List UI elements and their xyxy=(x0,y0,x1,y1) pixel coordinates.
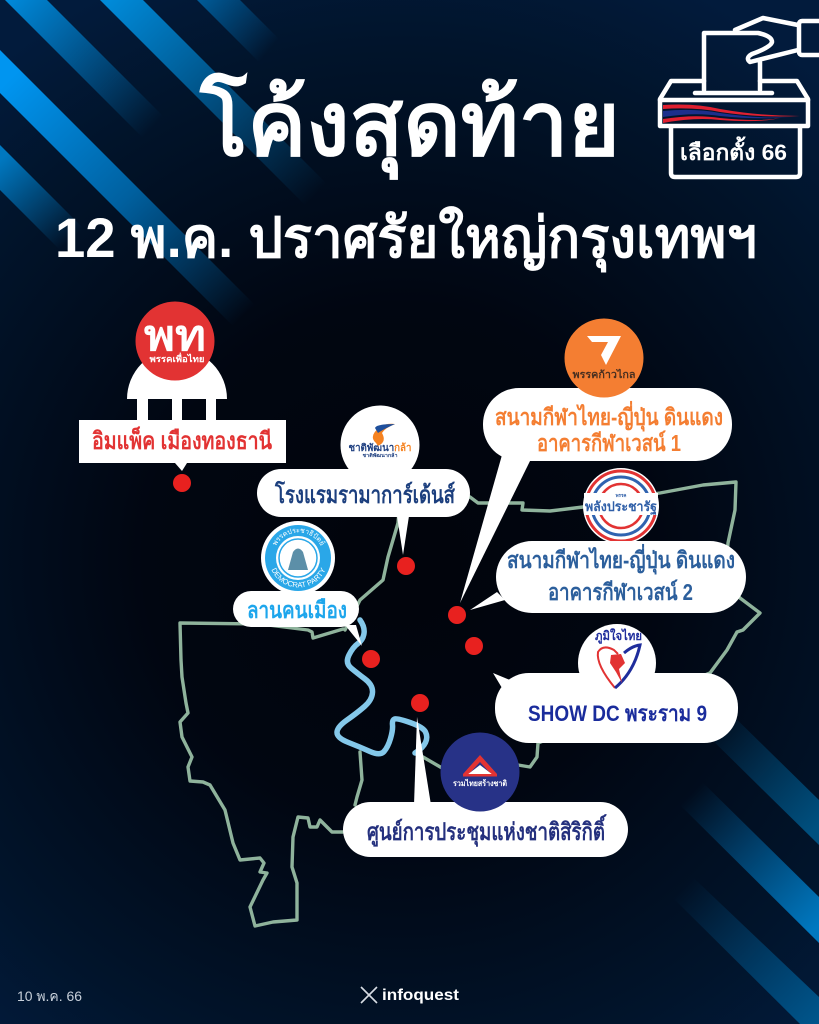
Pheu Thai canopy xyxy=(127,349,227,421)
dot: Thai-Japan 1 and 2 xyxy=(448,606,466,624)
callout: Lan Khon Mueang: ลานคนเมือง xyxy=(247,597,347,623)
dot: Rama Gardens xyxy=(397,557,415,575)
dot: Lan Khon Mueang xyxy=(362,650,380,668)
callout: SHOW DC xyxy=(493,624,738,743)
logo: Chart Pattana Kla: ชาติพัฒนากล้า xyxy=(348,442,412,454)
logo: Move Forward: พรรคก้าวไกล xyxy=(572,368,636,381)
callout: Sirikit Centre xyxy=(343,717,628,857)
subtitle: 12 พ.ค. ปราศรัยใหญ่กรุงเทพฯ xyxy=(55,205,757,273)
logo: Democrat: พรรคประชาธิปัตย์ xyxy=(272,528,326,546)
logo: Palang Pracharath: พรรค xyxy=(616,493,626,498)
logo: Chart Pattana Kla: ชาติพัฒนากล้า xyxy=(362,452,398,459)
ballot ribbon xyxy=(663,104,800,123)
callout: Pheu Thai: อิมแพ็ค เมืองทองธานี xyxy=(92,426,272,455)
logo: Move Forward xyxy=(564,318,644,398)
callout: Rama Gardens: โรงแรมรามาการ์เด้นส์ xyxy=(274,480,455,509)
date: 10 พ.ค. 66 xyxy=(17,988,82,1004)
logo: Bhumjaithai xyxy=(595,628,642,688)
logo: Ruam Thai Sang Chart xyxy=(440,732,520,812)
callout: Thai-Japan 2: อาคารกีฬาเวสน์ 2 xyxy=(548,579,693,605)
callout: Thai-Japan 1: สนามกีฬาไทย-ญี่ปุ่น ดินแดง xyxy=(495,400,723,432)
callout: Thai-Japan 1 xyxy=(460,388,732,603)
dot: SHOW DC xyxy=(465,637,483,655)
callout: Sirikit Centre: ศูนย์การประชุมแห่งชาติสิริกิติ์ xyxy=(367,814,607,848)
callout: Thai-Japan 2 xyxy=(470,541,746,613)
dot: Sirikit Centre xyxy=(411,694,429,712)
logo: Democrat xyxy=(261,521,335,591)
logo: Pheu Thai: พท xyxy=(144,312,206,359)
logo: Palang Pracharath: พลังประชารัฐ xyxy=(585,499,657,516)
title: โค้งสุดท้าย xyxy=(199,72,620,181)
map: province outline xyxy=(180,482,760,926)
callout: SHOW DC: SHOW DC พระราม 9 xyxy=(528,701,707,726)
logo: Chart Pattana Kla xyxy=(340,406,420,484)
logo: Palang Pracharath xyxy=(583,468,659,544)
ballot box label: เลือกตั้ง 66 xyxy=(680,136,787,165)
logo: Pheu Thai: พรรคเพื่อไทย xyxy=(150,352,204,364)
callout: Thai-Japan 2: สนามกีฬาไทย-ญี่ปุ่น ดินแดง xyxy=(507,543,735,575)
callout: Pheu Thai xyxy=(79,349,286,471)
logo: Bhumjaithai: ภูมิใจไทย xyxy=(595,628,642,644)
logo: Ruam Thai Sang Chart: รวมไทยสร้างชาติ xyxy=(453,778,507,788)
callout: Rama Gardens xyxy=(257,469,470,555)
map: river xyxy=(337,620,427,754)
logo: Pheu Thai xyxy=(136,302,214,380)
logo: Democrat: DEMOCRAT PARTY xyxy=(272,567,325,588)
footer logo: infoquest: infoquest xyxy=(382,987,460,1004)
dot: Pheu Thai xyxy=(173,474,191,492)
icon: ballot box xyxy=(660,18,819,177)
callout: Thai-Japan 1: อาคารกีฬาเวสน์ 1 xyxy=(537,430,681,456)
callout: Lan Khon Mueang xyxy=(233,591,362,646)
